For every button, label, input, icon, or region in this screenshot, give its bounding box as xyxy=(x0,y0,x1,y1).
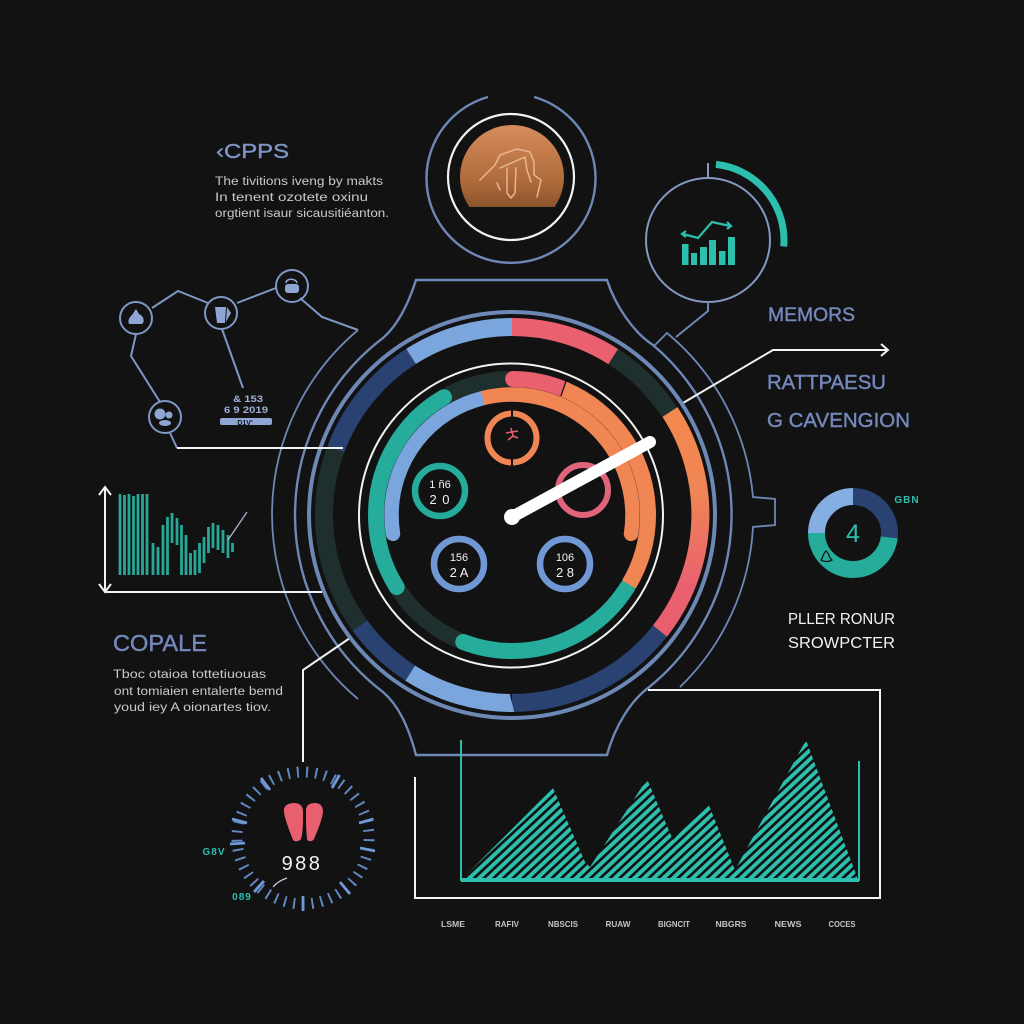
watch bezel ring xyxy=(309,312,715,718)
subdial: blue left: 156 xyxy=(450,552,468,564)
heading: KCPPS: ‹CPPS xyxy=(216,141,289,163)
text block: top left description xyxy=(215,176,389,220)
subdial: orange xyxy=(488,409,536,467)
chart medallion: trend bars xyxy=(632,163,784,337)
icon: feet xyxy=(284,803,323,841)
donut caption: PLLER RONUR xyxy=(788,611,895,628)
left waveform chart xyxy=(99,487,247,592)
subdial: teal: 1 ñ6 xyxy=(429,479,451,491)
chart axis labels xyxy=(441,919,856,929)
network caption: & 153 xyxy=(233,394,263,404)
bezel orange-to-red segment xyxy=(660,412,700,631)
chart axis labels: RUAW xyxy=(606,919,631,929)
chart axis labels: NBGRS xyxy=(716,919,747,929)
network caption xyxy=(220,394,272,427)
text block: lower left description: youd iey A oionartes tiov. xyxy=(114,702,271,714)
text block: top left description: In tenent ozotete oxinu xyxy=(215,192,368,204)
network diagram xyxy=(120,270,358,448)
subdial: teal xyxy=(415,466,465,516)
subdial: blue right: 2 8 xyxy=(556,565,574,580)
network caption: 6 9 2019 xyxy=(224,405,268,415)
text block: lower left description xyxy=(113,669,283,714)
chart axis labels: LSME xyxy=(441,919,465,929)
chart axis labels: NEWS xyxy=(774,919,802,929)
gauge with feet icon: 089 xyxy=(232,892,252,903)
text block: lower left description: ont tomiaien entalerte bemd xyxy=(114,686,283,698)
watch case outline xyxy=(272,280,775,755)
donut caption xyxy=(788,611,895,652)
activity rings xyxy=(376,379,648,651)
leader line to network xyxy=(177,447,343,449)
subdial: blue left xyxy=(434,539,484,589)
leader lines xyxy=(105,344,888,898)
top medallion: hand icon xyxy=(427,97,596,263)
gauge with feet icon: 988 xyxy=(282,853,322,875)
right headings: RATTPAESU xyxy=(767,372,886,394)
subdial: blue right xyxy=(540,539,590,589)
donut caption: SROWPCTER xyxy=(788,635,895,652)
gauge with feet icon xyxy=(202,772,375,911)
heading: COPALE: COPALE xyxy=(113,630,207,656)
gauge with feet icon: G8V xyxy=(202,847,226,858)
donut chart: GBN xyxy=(894,495,920,506)
right headings: G CAVENGION xyxy=(767,410,910,432)
donut chart: 4 xyxy=(846,520,860,548)
bottom hatched area chart xyxy=(460,740,860,882)
right headings xyxy=(767,305,910,432)
subdial: blue right: 106 xyxy=(556,552,574,564)
separator between red and orange xyxy=(561,378,567,396)
subdial: red xyxy=(558,465,608,515)
text block: top left description: orgtient isaur sicausitiéanton. xyxy=(215,208,389,220)
subdial: teal: 2 0 xyxy=(429,492,451,507)
right headings: MEMORS xyxy=(768,305,855,326)
chart axis labels: BIGNCIT xyxy=(658,919,691,929)
subdial: blue left: 2 A xyxy=(450,565,469,580)
chart axis labels: NBSCIS xyxy=(548,919,578,929)
text block: top left description: The tivitions iveng by makts xyxy=(215,176,383,188)
text block: lower left description: Tboc otaioa tottetiuouas xyxy=(113,669,266,681)
chart axis labels: COCES xyxy=(828,919,856,929)
chart axis labels: RAFIV xyxy=(495,919,519,929)
watch hand xyxy=(504,442,650,525)
inner white ring xyxy=(359,364,663,668)
network caption: D1V' xyxy=(237,420,253,427)
donut chart xyxy=(816,495,920,570)
